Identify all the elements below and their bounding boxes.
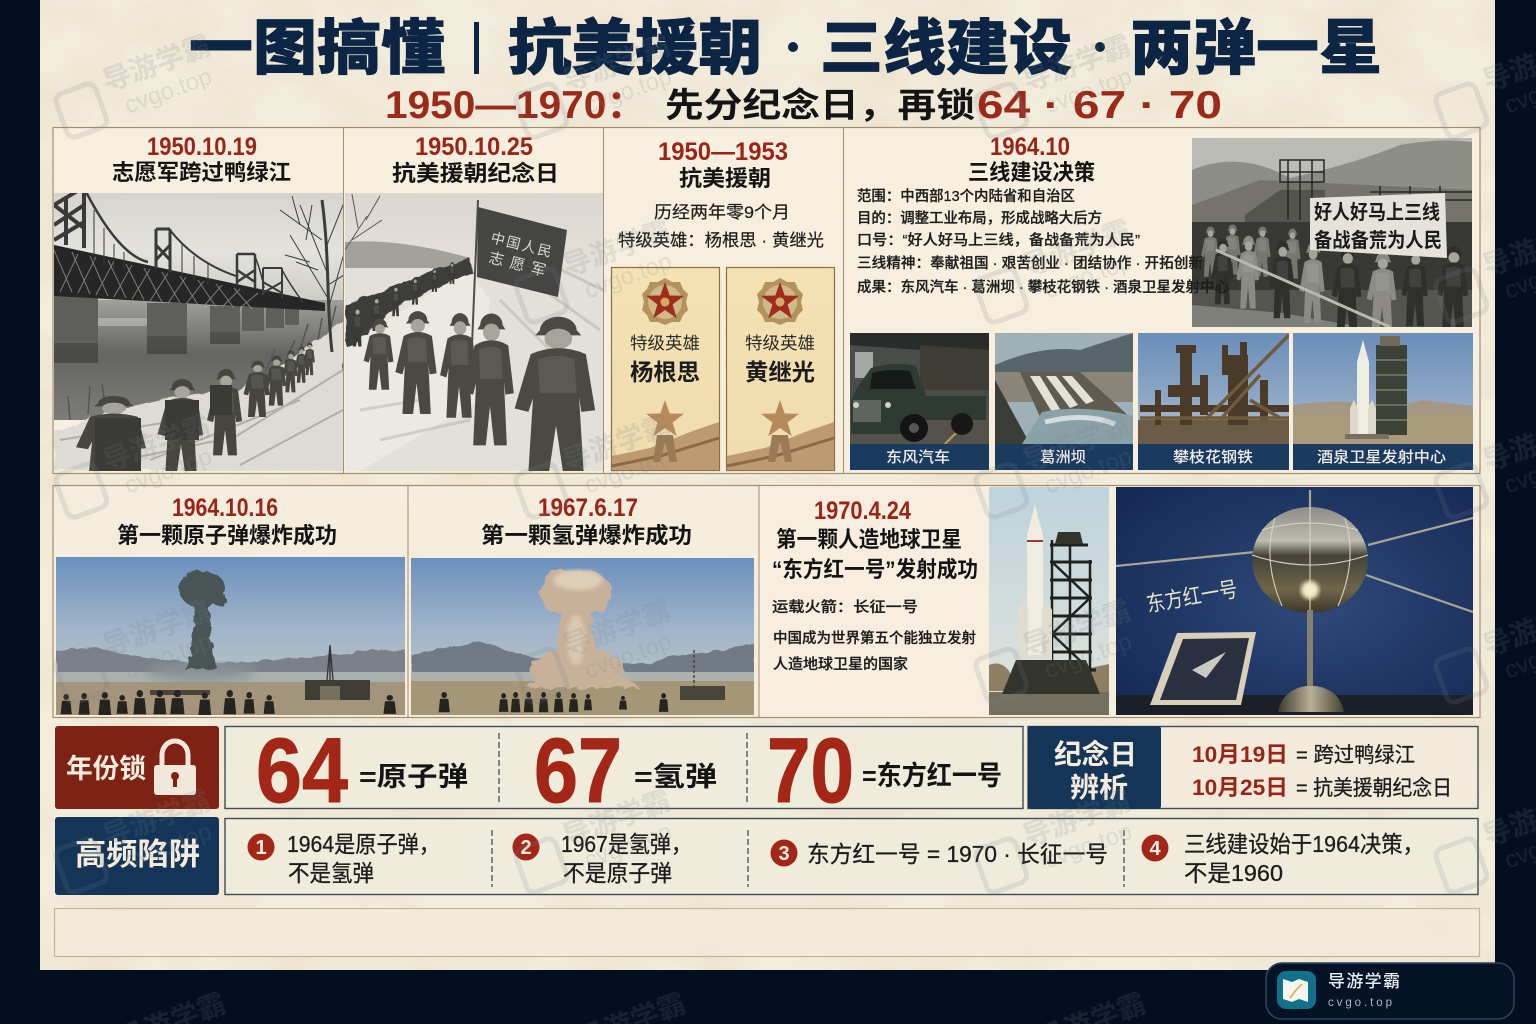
text block: details: 范围：中西部13个内陆省和自治区	[857, 188, 1075, 205]
plaque	[1150, 632, 1256, 705]
date: 1967.6.17	[538, 494, 638, 522]
year 67: 67	[534, 720, 622, 822]
watermarks: 导游学霸	[559, 215, 675, 282]
text block: significance: 人造地球卫星的国家	[773, 656, 909, 673]
panel: second row frame	[53, 486, 1480, 718]
watermarks: cvgo.top	[1041, 248, 1136, 304]
year 67: =氢弹	[634, 762, 717, 792]
marching column	[345, 258, 472, 345]
watermarks: cvgo.top	[581, 628, 676, 684]
line: Oct 25: = 抗美援朝纪念日	[1296, 777, 1452, 800]
watermarks: 导游学霸	[559, 410, 675, 477]
trap 2: 不是原子弹	[563, 860, 672, 886]
image: Gezhouba dam: 葛洲坝	[1040, 449, 1086, 466]
heading line 2: “东方红一号”发射成功	[772, 557, 978, 582]
label: 辨析	[1070, 772, 1128, 803]
year 64	[256, 720, 468, 822]
logo badge	[1266, 963, 1514, 1019]
image: atomic mushroom cloud	[56, 557, 405, 715]
card: Yang Gensi: 杨根思	[630, 359, 700, 385]
front soldiers	[364, 311, 595, 471]
watermarks: cvgo.top	[1041, 63, 1136, 119]
watermarks: cvgo.top	[121, 63, 216, 119]
text block: significance: 中国成为世界第五个能独立发射	[773, 629, 976, 647]
subtitle: 64 · 67 · 70	[977, 84, 1222, 127]
image: construction crowd with banner	[1192, 138, 1472, 327]
text block: rocket: 运载火箭：长征一号	[772, 598, 918, 616]
logo badge: 导游学霸	[1328, 971, 1400, 991]
trap 2: 1967是氢弹，	[561, 831, 692, 857]
card: Yang Gensi: 特级英雄	[630, 334, 700, 353]
trap 4: 三线建设始于1964决策，	[1184, 831, 1424, 857]
heading: 三线建设决策	[968, 160, 1095, 185]
watermarks: 导游学霸	[1019, 215, 1135, 282]
banner	[1310, 193, 1447, 258]
label	[1028, 726, 1161, 809]
panel: 1964.10 third front construction	[850, 133, 1473, 470]
image: Dongfeng truck: 东风汽车	[886, 448, 950, 466]
subtitle: 1950—1970：	[385, 84, 647, 127]
heading: 第一颗氢弹爆炸成功	[481, 523, 692, 548]
year 70	[767, 720, 1002, 822]
image: Dongfeng truck	[850, 333, 989, 470]
card: Huang Jiguang: 黄继光	[745, 359, 815, 385]
bank	[54, 320, 343, 471]
soldiers	[76, 342, 315, 482]
watermarks: cvgo.top	[121, 443, 216, 499]
watermarks: 导游学霸	[1019, 30, 1135, 97]
text block: details: 目的：调整工业布局，形成战略大后方	[857, 209, 1102, 227]
image: hydrogen mushroom cloud	[411, 558, 754, 715]
image: volunteer soldiers with flag: 志愿军	[487, 249, 547, 280]
trap 2: 2	[520, 837, 532, 859]
trap 4: 不是1960	[1184, 860, 1283, 886]
watermarks: 导游学霸	[99, 595, 215, 662]
text block: significance	[773, 629, 976, 673]
card: Huang Jiguang: 特级英雄	[745, 334, 815, 353]
watermarks: 导游学霸	[99, 785, 215, 852]
watermarks: 导游学霸	[1019, 595, 1135, 662]
heading: 抗美援朝纪念日	[392, 161, 559, 186]
text block: details: 口号：“好人好马上三线，备战备荒为人民”	[857, 232, 1140, 249]
panel: top row frame	[53, 128, 1480, 474]
date: 1964.10	[990, 133, 1070, 161]
panel: common traps list	[225, 818, 1478, 894]
line: Oct 25	[1192, 775, 1452, 800]
year 64: =原子弹	[359, 762, 468, 792]
icon: medal	[757, 278, 803, 325]
icon: medal	[642, 278, 688, 325]
text block: details	[857, 188, 1229, 296]
flag	[472, 200, 478, 345]
line: Oct 19	[1192, 742, 1415, 767]
image: Long March rocket on pad	[989, 487, 1109, 715]
bare tree	[280, 196, 345, 352]
watermarks: cvgo.top	[1041, 628, 1136, 684]
date: 1964.10.16	[172, 494, 278, 522]
trap 4	[1142, 831, 1424, 886]
image: Gezhouba dam	[995, 333, 1133, 470]
title: 抗美援朝	[508, 15, 762, 82]
date: 1970.4.24	[814, 497, 911, 525]
panel: 1950—1953 war summary	[612, 138, 834, 470]
truss	[54, 245, 325, 311]
year 70: 70	[767, 720, 854, 822]
watermarks: cvgo.top	[121, 628, 216, 684]
panel: 1964.10.16 atomic bomb	[56, 494, 405, 715]
panel: empty footer box	[54, 908, 1480, 956]
panel: common traps label: 高频陷阱	[75, 837, 200, 872]
icon: map logo	[1277, 971, 1316, 1009]
watermarks: 导游学霸	[559, 785, 675, 852]
trap 4: 4	[1149, 838, 1161, 860]
watermarks: 导游学霸	[559, 595, 675, 662]
heading: 抗美援朝	[679, 166, 771, 191]
panel: year lock label: 年份锁	[66, 754, 146, 784]
watermarks: cvgo.top	[581, 443, 676, 499]
panel: 1950.10.19 crossing the Yalu	[54, 133, 345, 482]
watermarks: 导游学霸	[559, 30, 675, 97]
watermarks: 导游学霸	[1019, 410, 1135, 477]
heading: 志愿军跨过鸭绿江	[112, 160, 291, 185]
year 64: 64	[256, 720, 348, 822]
panel: memorial day comparison	[1028, 726, 1478, 809]
trap 1: 不是氢弹	[288, 860, 374, 886]
subtitle: 先分纪念日，再锁	[665, 87, 975, 125]
title	[189, 15, 1382, 82]
watermarks: 导游学霸	[1019, 785, 1135, 852]
trap 3: 3	[778, 843, 790, 865]
panel: 1950.10.25 memorial day	[345, 133, 603, 471]
card: Huang Jiguang	[726, 268, 834, 470]
heading: 第一颗原子弹爆炸成功	[117, 523, 337, 548]
image: Panzhihua steel: 攀枝花钢铁	[1173, 449, 1253, 466]
panel: year lock values	[225, 720, 1023, 822]
date: 1950.10.25	[415, 133, 533, 161]
image: construction crowd with banner: 好人好马上三线	[1314, 201, 1440, 224]
watermarks: cvgo.top	[581, 248, 676, 304]
title: 一图搞懂	[189, 15, 445, 82]
line: Oct 19: 10月19日	[1192, 742, 1288, 767]
line: Oct 25: 10月25日	[1192, 775, 1288, 800]
watermarks: cvgo.top	[121, 818, 216, 874]
watermarks: cvgo.top	[581, 818, 676, 874]
watermarks: cvgo.top	[581, 63, 676, 119]
trap 2	[512, 831, 692, 886]
caption on wall: 东方红一号	[1145, 576, 1239, 617]
watermarks: 导游学霸	[99, 30, 215, 97]
panel: 1970.4.24 Dongfanghong-1	[772, 487, 1473, 715]
trap 3: 东方红一号 = 1970 · 长征一号	[807, 841, 1108, 867]
image: Panzhihua steel	[1138, 333, 1289, 470]
line: Oct 19: = 跨过鸭绿江	[1296, 744, 1415, 767]
label: 纪念日	[1054, 738, 1137, 770]
watermarks: cvgo.top	[1041, 818, 1136, 874]
image: Jiuquan launch center: 酒泉卫星发射中心	[1317, 449, 1446, 466]
year 67	[534, 720, 717, 822]
trap 1	[248, 831, 440, 886]
heading: 第一颗人造地球卫星	[776, 527, 962, 552]
icon: padlock	[154, 741, 196, 795]
towers and cables	[54, 187, 303, 302]
subtitle	[385, 84, 1222, 127]
image: Dongfanghong-1 satellite exhibit	[1116, 487, 1473, 715]
panel: common traps label	[55, 817, 219, 895]
image: Yalu bridge and soldiers	[54, 193, 343, 471]
heroes text: 特级英雄：杨根思 · 黄继光	[618, 231, 824, 250]
date: 1950—1953	[658, 138, 788, 166]
trap 1: 1	[255, 837, 267, 859]
icon: star monument	[612, 400, 719, 470]
duration text: 历经两年零9个月	[654, 203, 790, 222]
image: volunteer soldiers with flag	[345, 193, 603, 471]
panel: year lock label	[55, 726, 219, 809]
watermarks: cvgo.top	[1041, 443, 1136, 499]
text block: details: 三线精神：奉献祖国 · 艰苦创业 · 团结协作 · 开拓创新	[857, 254, 1203, 272]
date: 1950.10.19	[147, 133, 257, 161]
trap 1: 1964是原子弹，	[287, 831, 440, 857]
card: Yang Gensi	[612, 268, 720, 470]
text block: details: 成果：东风汽车 · 葛洲坝 · 攀枝花钢铁 · 酒泉卫星发射中心	[857, 278, 1229, 296]
image: Jiuquan launch center	[1293, 333, 1473, 470]
image: volunteer soldiers with flag: 中国人民	[489, 229, 553, 260]
panel: 1967.6.17 hydrogen bomb	[411, 494, 754, 715]
title: 三线建设	[820, 15, 1072, 82]
year 70: =东方红一号	[862, 760, 1002, 791]
icon: star monument	[727, 400, 834, 470]
logo badge: cvgo.top	[1328, 997, 1392, 1009]
image: construction crowd with banner: 备战备荒为人民	[1314, 229, 1442, 252]
watermarks: 导游学霸	[99, 410, 215, 477]
title: 两弹一星	[1130, 15, 1382, 82]
